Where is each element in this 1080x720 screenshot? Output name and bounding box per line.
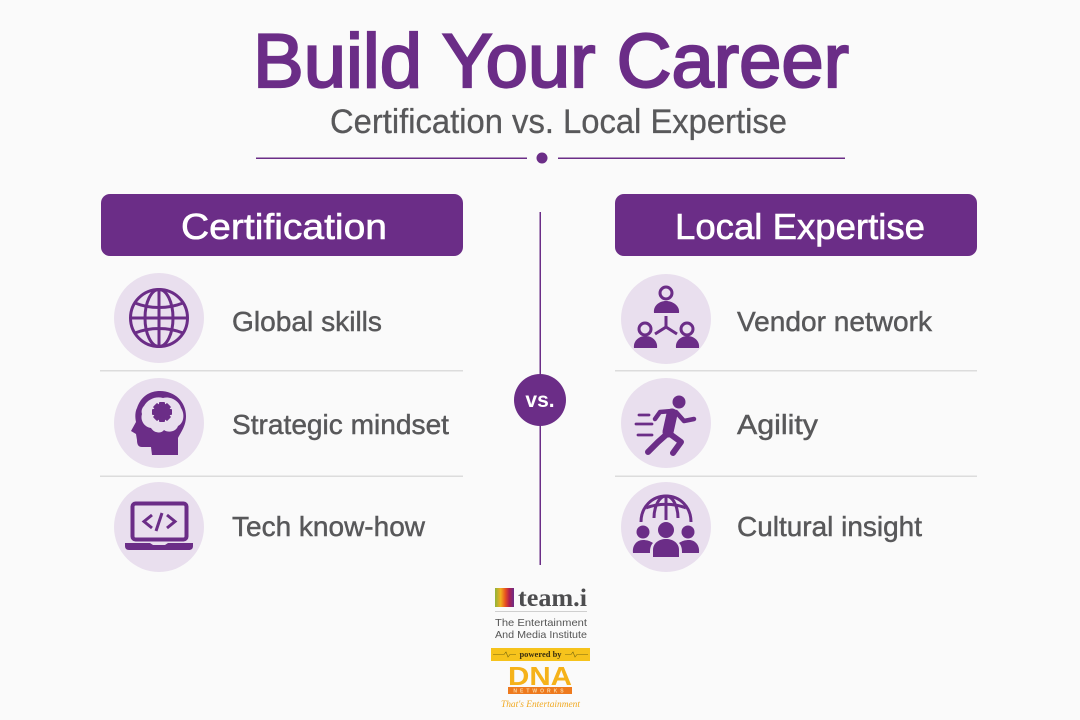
label: tech know-how: Tech know-how xyxy=(232,511,426,542)
label: strategic mindset: Strategic mindset xyxy=(232,409,449,440)
title: Build Your Career xyxy=(253,19,849,104)
icon: laptop with code xyxy=(114,482,204,572)
vs badge xyxy=(514,374,566,426)
icon: vendor network xyxy=(621,274,711,364)
heading: local expertise: Local Expertise xyxy=(675,206,925,247)
heading: local expertise xyxy=(615,194,977,256)
label: agility: Agility xyxy=(737,409,818,440)
panel: certification xyxy=(100,194,463,572)
icon: head with brain xyxy=(114,378,204,468)
title divider xyxy=(256,152,845,164)
logo: team.i powered by DNA: team.i xyxy=(518,585,587,612)
logo: team.i powered by DNA: powered by xyxy=(519,649,562,659)
logo: team.i powered by DNA: DNA xyxy=(508,661,572,691)
icon: people and globe xyxy=(621,482,711,572)
logo: team.i powered by DNA: The Entertainment xyxy=(495,617,587,629)
heading: certification: Certification xyxy=(181,206,387,247)
logo: team.i powered by DNA: That's Entertainment xyxy=(501,699,581,709)
subtitle: Certification vs. Local Expertise xyxy=(330,103,787,141)
label: cultural insight: Cultural insight xyxy=(737,511,922,542)
logo: team.i powered by DNA: NETWORKS xyxy=(513,688,567,694)
vs badge: vs. xyxy=(525,389,555,412)
center divider xyxy=(540,212,541,565)
panel: local expertise xyxy=(615,194,977,572)
heading: certification xyxy=(101,194,463,256)
logo: team.i powered by DNA: And Media Institute xyxy=(495,629,587,641)
icon: running person xyxy=(621,378,711,468)
icon: globe xyxy=(114,273,204,363)
label: vendor network: Vendor network xyxy=(737,306,933,337)
label: global skills: Global skills xyxy=(232,306,382,337)
logo: team.i powered by DNA xyxy=(491,585,590,709)
